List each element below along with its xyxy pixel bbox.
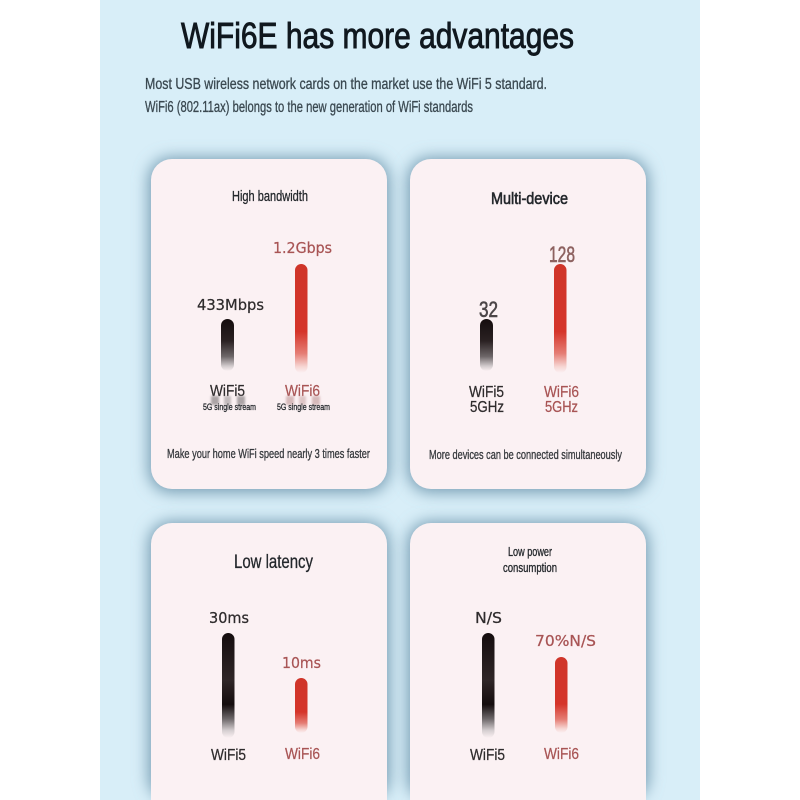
caption: WiFi6 stream: 5G single stream [277, 402, 330, 413]
bar: WiFi6 latency [295, 678, 308, 733]
background panel [100, 0, 700, 800]
heading: low power consumption: consumption [503, 561, 557, 575]
label: WiFi6 5GHz [544, 384, 579, 416]
bar: WiFi5 power [482, 633, 494, 738]
bar: WiFi6 devices [554, 264, 566, 373]
heading: low power consumption [503, 545, 557, 575]
label: WiFi5: WiFi5 [210, 383, 245, 400]
bar: WiFi6 speed [295, 264, 308, 373]
panel: high bandwidth [149, 158, 389, 492]
footer: multi-device: More devices can be connected simultaneously [429, 447, 622, 462]
label: N/S: N/S [475, 609, 502, 627]
label: WiFi6 5GHz: 5GHz [545, 399, 578, 416]
title: WiFi6E has more advantages [181, 15, 574, 56]
label: WiFi5 5GHz: WiFi5 [469, 384, 504, 401]
label: WiFi6 5GHz: WiFi6 [544, 384, 579, 401]
label: 433Mbps: 433Mbps [197, 296, 264, 314]
heading: high bandwidth: High bandwidth [232, 188, 308, 205]
label: WiFi5: WiFi5 [211, 747, 246, 764]
intro text: Most USB wireless network cards on the market use the WiFi 5 standard. [145, 76, 547, 93]
bar: WiFi5 latency [222, 633, 234, 738]
label: 1.2Gbps: 1.2Gbps [273, 239, 332, 257]
label: WiFi6: WiFi6 [285, 746, 320, 763]
label: 30ms: 30ms [209, 609, 249, 627]
label: WiFi6: WiFi6 [285, 383, 320, 400]
label: 10ms: 10ms [282, 654, 321, 672]
bar: WiFi5 devices [480, 319, 493, 371]
caption: WiFi5 stream: 5G single stream [203, 402, 256, 413]
footer: high bandwidth: Make your home WiFi speed nearly 3 times faster [167, 446, 370, 461]
panel: multi-device [408, 158, 648, 492]
label: WiFi6: WiFi6 [544, 746, 579, 763]
heading: multi-device: Multi-device [491, 190, 568, 208]
smudges over captions [211, 396, 320, 405]
intro text [145, 76, 547, 116]
heading: low power consumption: Low power [508, 545, 552, 559]
bar: WiFi5 speed [221, 319, 234, 371]
panel: low power consumption [408, 522, 648, 800]
heading: low latency: Low latency [234, 552, 313, 573]
label: WiFi5 5GHz: 5GHz [470, 399, 504, 416]
panel: low latency [149, 522, 389, 800]
label: 32: 32 [479, 297, 498, 322]
intro text: WiFi6 (802.11ax) belongs to the new generation of WiFi standards [145, 99, 473, 116]
bar: WiFi6 power [555, 657, 568, 733]
label: 70%N/S: 70%N/S [535, 632, 596, 650]
label: WiFi5 5GHz [469, 384, 504, 416]
label: 128: 128 [549, 242, 575, 267]
label: WiFi5: WiFi5 [470, 747, 505, 764]
